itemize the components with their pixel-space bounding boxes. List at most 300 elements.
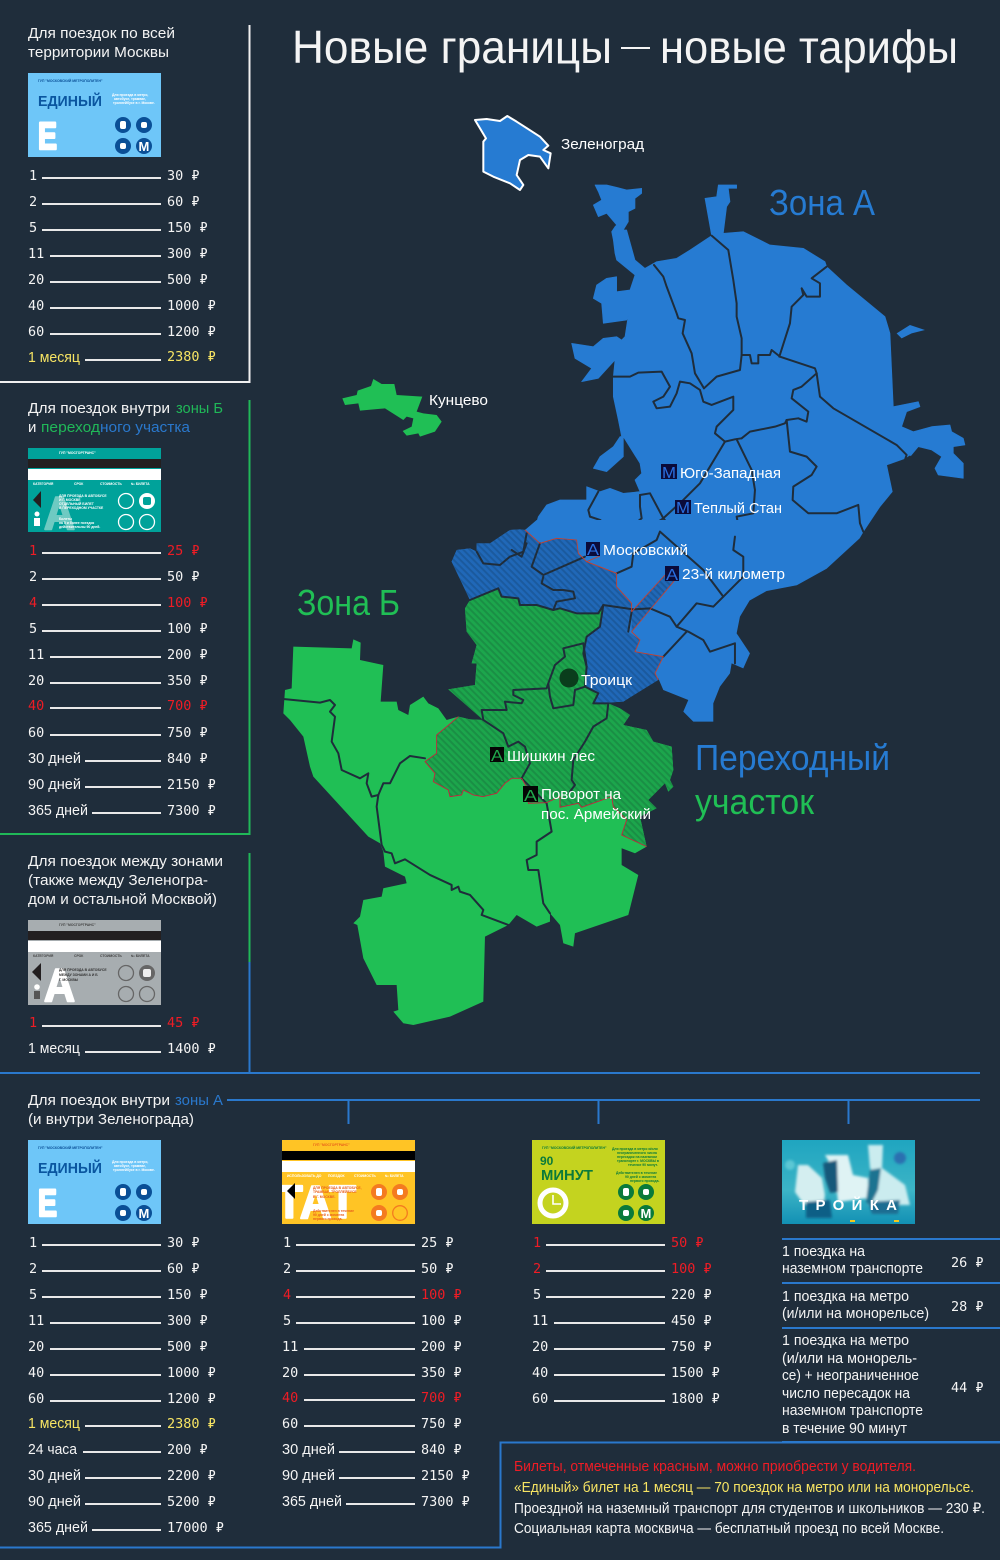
card: grey (28, 920, 161, 1011)
card: grey: СТОИМОСТЬ (100, 954, 122, 958)
row: 20 (28, 272, 44, 288)
row: 2 (29, 569, 37, 585)
region: zone A north (525, 185, 965, 600)
card: Edinyi (28, 73, 161, 158)
heading: inside zone A: (и внутри Зеленограда) (28, 1111, 194, 1128)
row: 20 (28, 673, 44, 689)
row: 700 ₽ (167, 698, 208, 714)
row (28, 1468, 216, 1484)
row: 750 ₽ (421, 1416, 462, 1432)
row: 2200 ₽ (167, 1468, 216, 1484)
tariff: 90 minutes: в течение 90 минут (782, 1421, 907, 1437)
row (28, 1313, 208, 1329)
card: TAT yellow: ТРАМВАЕ, ТРОЛЛЕЙБУСЕ (313, 1190, 357, 1194)
tariff: 90 minutes: число пересадок на (782, 1386, 911, 1402)
row: 40 (28, 298, 44, 314)
card: Edinyi: ЕДИНЫЙ (38, 1159, 102, 1177)
row: 90 дней (28, 777, 81, 793)
card: Edinyi: М (138, 139, 149, 154)
card: grey: МЕЖДУ ЗОНАМИ А И Б (59, 973, 98, 977)
row: 350 ₽ (421, 1365, 462, 1381)
hatched transitional area: green (425, 588, 673, 847)
row: 1 (29, 168, 37, 184)
row (28, 1442, 208, 1458)
row: 60 (28, 1391, 44, 1407)
card: ground teal: № БИЛЕТА (131, 482, 150, 486)
row (29, 569, 200, 585)
row: 45 ₽ (167, 1015, 200, 1031)
row (532, 1339, 712, 1355)
tariff: 90 minutes: се) + неограниченное (782, 1368, 919, 1384)
row: 20 (282, 1365, 298, 1381)
card: TAT yellow: ГУП "МОСГОРТРАНС" (313, 1143, 350, 1147)
stop: Shishkin les: А (491, 748, 503, 765)
row (282, 1494, 470, 1510)
row: 1500 ₽ (671, 1365, 720, 1381)
row: 30 дней (28, 1468, 81, 1484)
row: 100 ₽ (167, 621, 208, 637)
row (28, 324, 216, 340)
row: 5200 ₽ (167, 1494, 216, 1510)
card: Edinyi (28, 1140, 161, 1225)
row (282, 1442, 462, 1458)
card: TAT yellow: первого прохода. (313, 1217, 342, 1221)
row: 50 ₽ (167, 569, 200, 585)
row: 1 месяц (28, 1041, 80, 1057)
row: 150 ₽ (167, 1287, 208, 1303)
card: Edinyi: М (138, 1206, 149, 1221)
row: 1000 ₽ (167, 1365, 216, 1381)
card: grey: А (44, 959, 75, 1011)
card: Troika (782, 1140, 915, 1224)
tariff: surface: наземном транспорте (782, 1261, 923, 1277)
row: 25 ₽ (167, 543, 200, 559)
region: zone A south and zone B (283, 520, 750, 1025)
stop: Moskovsky: Московский (603, 542, 688, 559)
row (28, 1339, 208, 1355)
card: TAT yellow: СТОИМОСТЬ (354, 1174, 376, 1178)
price list (532, 1235, 720, 1407)
card: ground teal: СРОК (74, 482, 84, 486)
row (29, 1287, 208, 1303)
row: 4 (283, 1287, 291, 1303)
row (28, 1416, 216, 1432)
column: TAT (276, 1140, 470, 1510)
heading: Для поездок внутри (28, 400, 170, 417)
row: 1800 ₽ (671, 1391, 720, 1407)
column: Troika (782, 1140, 1000, 1443)
card: TAT yellow: ДЛЯ ПРОЕЗДА В АВТОБУСЕ, (313, 1186, 362, 1190)
zone label: transitional (695, 737, 890, 822)
row: 60 ₽ (167, 1261, 200, 1277)
card: ground teal: КАТЕГОРИЯ (33, 482, 54, 486)
heading (28, 853, 223, 908)
card: 90 minutes: Для проезда в метро и/или (612, 1147, 658, 1151)
row: 5 (533, 1287, 541, 1303)
card: Edinyi: Е (38, 116, 57, 158)
row: 11 (28, 246, 44, 262)
card: Edinyi: ЕДИНЫЙ (38, 92, 102, 110)
row: 100 ₽ (671, 1261, 712, 1277)
card: TAT yellow: ПОЕЗДОК (328, 1174, 346, 1178)
note: Edinyi month: «Единый» билет на 1 месяц — 70 поездок на метро или на монорельсе. (514, 1480, 974, 1496)
card: TAT yellow: ИСПОЛЬЗОВАТЬ ДО (287, 1174, 322, 1178)
zone label: transitional: участок (695, 781, 814, 822)
card: Edinyi: автобусе, трамвае, (114, 97, 146, 101)
tariff: 90 minutes: 1 поездка на метро (782, 1333, 909, 1349)
price list (28, 1235, 224, 1536)
row: 2 (533, 1261, 541, 1277)
card: ground teal: на 5 и более поездок (59, 521, 95, 525)
row: 11 (28, 647, 44, 663)
row: 2 (29, 1261, 37, 1277)
stop: Yugo-Zapadnaya: М (662, 465, 676, 482)
row: 60 (282, 1416, 298, 1432)
row: 90 дней (282, 1468, 335, 1484)
row: 20 (28, 1339, 44, 1355)
row: 2150 ₽ (421, 1468, 470, 1484)
map of Moscow zones (283, 116, 965, 1025)
row: 25 ₽ (421, 1235, 454, 1251)
row: 220 ₽ (671, 1287, 712, 1303)
row (282, 1365, 462, 1381)
card: TAT yellow (276, 1140, 415, 1228)
heading: дом и остальной Москвой) (28, 891, 217, 908)
row: 2380 ₽ (167, 1416, 216, 1432)
row: 150 ₽ (167, 220, 208, 236)
card: 90 minutes: транспорте г. МОСКВЫ в (617, 1159, 659, 1163)
heading: зоны Б (176, 400, 223, 417)
card: 90 minutes: неограниченного числа (617, 1151, 657, 1155)
card: 90 minutes: Действителен в течение (616, 1171, 657, 1175)
row (282, 1468, 470, 1484)
title (292, 21, 958, 73)
zone B territory (283, 588, 673, 1025)
stop: Shishkin les: Шишкин лес (507, 748, 596, 765)
card: 90 minutes (532, 1140, 665, 1224)
row (28, 1041, 216, 1057)
zone label: A: Зона А (769, 182, 875, 223)
stop: Povorot: А (524, 788, 537, 805)
row: 100 ₽ (421, 1287, 462, 1303)
tariff: surface: 26 ₽ (951, 1255, 984, 1271)
row (29, 220, 208, 236)
tariff: surface (782, 1244, 984, 1277)
row: 11 (282, 1339, 298, 1355)
row (28, 673, 208, 689)
row: 5 (29, 1287, 37, 1303)
row: 1 месяц (28, 1416, 80, 1432)
row: 500 ₽ (167, 272, 208, 288)
row: 4 (29, 595, 37, 611)
district borders: zone A north (575, 236, 910, 570)
icon: clock (540, 1190, 566, 1216)
card: TAT yellow: 90 дней с момента (313, 1213, 344, 1217)
row (28, 1365, 216, 1381)
row (29, 543, 200, 559)
card: ground teal: ДЛЯ ПРОЕЗДА В АВТОБУСЕ (59, 494, 107, 498)
row (533, 1235, 704, 1251)
card: grey: ДЛЯ ПРОЕЗДА В АВТОБУСЕ (59, 968, 107, 972)
heading (28, 25, 175, 61)
heading: переход (41, 419, 100, 436)
row: 750 ₽ (167, 725, 208, 741)
heading: ного участка (100, 419, 191, 436)
row (283, 1287, 462, 1303)
row: 7300 ₽ (167, 803, 216, 819)
row: 5 (283, 1313, 291, 1329)
row: 100 ₽ (167, 595, 208, 611)
tariff: 90 minutes: наземном транспорте (782, 1403, 923, 1419)
row: 7300 ₽ (421, 1494, 470, 1510)
tariff: metro: 28 ₽ (951, 1299, 984, 1315)
row (29, 1235, 200, 1251)
row: 840 ₽ (167, 751, 208, 767)
row: 90 дней (28, 1494, 81, 1510)
row: 11 (532, 1313, 548, 1329)
card: ground teal: И Г. МОСКВЕ (59, 498, 81, 502)
card: ground teal: А (44, 487, 75, 539)
row: 1 (29, 543, 37, 559)
heading: inside zone A: Для поездок внутри (28, 1092, 170, 1109)
region: Kuntsevo (342, 379, 442, 437)
region: Zelenograd (475, 116, 551, 190)
zone label: transitional: Переходный (695, 737, 890, 778)
tariff: metro (782, 1289, 984, 1322)
row: 1200 ₽ (167, 324, 216, 340)
row: 60 (532, 1391, 548, 1407)
card: Edinyi: ГУП "МОСКОВСКИЙ МЕТРОПОЛИТЕН" (38, 1146, 103, 1150)
row (29, 168, 200, 184)
row: 40 (28, 1365, 44, 1381)
heading: Для поездок между зонами (28, 853, 223, 870)
stop: Troitsk (560, 668, 632, 689)
heading: Для поездок по всей (28, 25, 175, 42)
card: 90 minutes: М (640, 1206, 651, 1221)
row: 200 ₽ (167, 647, 208, 663)
zone label: B: Зона Б (297, 582, 400, 623)
card: 90 minutes: первого прохода. (630, 1179, 659, 1183)
row: 750 ₽ (671, 1339, 712, 1355)
heading (28, 400, 223, 436)
row: 2150 ₽ (167, 777, 216, 793)
row (29, 621, 208, 637)
row (28, 647, 208, 663)
row: 24 часа (28, 1442, 78, 1458)
row (283, 1235, 454, 1251)
tariff: metro: 1 поездка на метро (782, 1289, 909, 1305)
panel: zone B and transitional (0, 400, 250, 834)
row (28, 698, 208, 714)
stop: Yugo-Zapadnaya: Юго-Западная (680, 465, 781, 482)
row (28, 1391, 216, 1407)
box frame (0, 1442, 1000, 1548)
row: 11 (28, 1313, 44, 1329)
row: 840 ₽ (421, 1442, 462, 1458)
row (28, 298, 216, 314)
row (28, 349, 216, 366)
row: 450 ₽ (671, 1313, 712, 1329)
card: 90 minutes: ГУП "МОСКОВСКИЙ МЕТРОПОЛИТЕН" (542, 1146, 607, 1150)
card: 90 minutes: пересадок на наземном (617, 1155, 657, 1159)
row (28, 1494, 216, 1510)
price list (28, 543, 216, 819)
row (532, 1365, 720, 1381)
row (29, 1015, 200, 1031)
row (532, 1313, 712, 1329)
card: ground teal: Билеты (59, 517, 72, 521)
card: Edinyi: Для проезда в метро, (112, 93, 148, 97)
transitional border: red lines (425, 530, 675, 847)
row: 2 (29, 194, 37, 210)
row: 365 дней (28, 1520, 88, 1536)
card: Edinyi: Для проезда в метро, (112, 1160, 148, 1164)
row (283, 1261, 454, 1277)
row: 50 ₽ (421, 1261, 454, 1277)
card: Edinyi: автобусе, трамвае, (114, 1164, 146, 1168)
price list (28, 1015, 216, 1057)
card: Edinyi: троллейбусе в г. Москве. (113, 1168, 155, 1172)
row (28, 803, 216, 819)
card: grey: КАТЕГОРИЯ (33, 954, 54, 958)
rules (782, 1238, 1000, 1443)
heading: inside zone A: зоны А (175, 1092, 223, 1109)
row: 500 ₽ (167, 1339, 208, 1355)
panel frame (0, 400, 250, 834)
row: 1200 ₽ (167, 1391, 216, 1407)
row (28, 751, 208, 767)
row (28, 777, 216, 793)
row: 40 (282, 1390, 298, 1406)
card: TAT yellow: В Г. МОСКВЕ. (313, 1195, 335, 1199)
heading: и (28, 419, 36, 436)
row: 5 (29, 621, 37, 637)
column: 90 minutes (532, 1140, 720, 1407)
card: grey: СРОК (74, 954, 84, 958)
district borders: south (283, 532, 743, 925)
row: 1 (29, 1235, 37, 1251)
stop: Povorot (523, 786, 651, 823)
heading: территории Москвы (28, 44, 169, 61)
row: 1000 ₽ (167, 298, 216, 314)
card: grey: Г. МОСКВЫ (59, 978, 79, 982)
row (28, 725, 208, 741)
stop: 23rd km: А (666, 567, 678, 584)
row: 2380 ₽ (167, 349, 216, 365)
row: 1400 ₽ (167, 1041, 216, 1057)
card: ground teal: В ПЕРЕХОДНОМ УЧАСТКЕ (59, 506, 104, 510)
row: 30 дней (282, 1442, 335, 1458)
title: новые тарифы (660, 21, 958, 73)
card: grey: ГУП "МОСГОРТРАНС" (59, 923, 96, 927)
column: Edinyi (28, 1140, 224, 1536)
card: Edinyi: Е (38, 1183, 57, 1225)
panel frame (0, 25, 250, 382)
heading: inside zone A (28, 1092, 223, 1128)
panel: whole Moscow (0, 25, 250, 382)
hatched transitional area: blue (452, 529, 675, 703)
card: ground teal: ГУП "МОСГОРТРАНС" (59, 451, 96, 455)
divider lines for zone A section (0, 1073, 980, 1124)
stop: Povorot: пос. Армейский (541, 806, 651, 823)
row (28, 246, 208, 262)
price list (28, 168, 216, 366)
card: Troika: ТРОЙКА (799, 1196, 897, 1214)
row (29, 1261, 200, 1277)
row: 60 ₽ (167, 194, 200, 210)
row: 60 (28, 324, 44, 340)
tariff: 90 minutes: (и/или на монорель- (782, 1351, 917, 1367)
row: 17000 ₽ (167, 1520, 224, 1536)
row (28, 1520, 224, 1536)
card: ground teal: СТОИМОСТЬ (100, 482, 122, 486)
row (282, 1416, 462, 1432)
card: ground teal (28, 448, 161, 539)
card: ground teal: ОТДЕЛЬНЫЙ БИЛЕТ (59, 502, 95, 506)
row: 300 ₽ (167, 1313, 208, 1329)
stop: Teply Stan: Теплый Стан (694, 500, 782, 517)
row: 700 ₽ (421, 1390, 462, 1406)
row: 1 (283, 1235, 291, 1251)
stop: Moskovsky: А (587, 542, 599, 559)
row (29, 194, 200, 210)
card: ground teal: действительны 90 дней. (59, 525, 100, 529)
row: 30 дней (28, 751, 81, 767)
row: 1 месяц (28, 350, 80, 366)
panel frame (248, 853, 250, 1073)
row: 40 (532, 1365, 548, 1381)
row (282, 1339, 462, 1355)
row: 1 (533, 1235, 541, 1251)
stop: Troitsk: Троицк (581, 672, 632, 689)
stop: 23rd km: 23-й километр (682, 566, 785, 583)
note: social card: Социальная карта москвича — бесплатный проезд по всей Москве. (514, 1521, 944, 1537)
row: 350 ₽ (167, 673, 208, 689)
row: 300 ₽ (167, 246, 208, 262)
row: 5 (29, 220, 37, 236)
row: 50 ₽ (671, 1235, 704, 1251)
card: 90 minutes: 90 (540, 1154, 554, 1168)
tariff: 90 minutes (782, 1333, 984, 1437)
row: 2 (283, 1261, 291, 1277)
card: Edinyi: ГУП "МОСКОВСКИЙ МЕТРОПОЛИТЕН" (38, 79, 103, 83)
notes box (0, 1442, 1000, 1548)
row: 200 ₽ (421, 1339, 462, 1355)
price list (282, 1235, 470, 1510)
tariff: metro: (и/или на монорельсе) (782, 1306, 929, 1322)
row (29, 595, 208, 611)
row (532, 1391, 720, 1407)
card: TAT yellow: № БИЛЕТА (385, 1174, 404, 1178)
row (533, 1287, 712, 1303)
row: 1 (29, 1015, 37, 1031)
panel: between zones (28, 853, 250, 1073)
tariff: surface: 1 поездка на (782, 1244, 866, 1260)
card: 90 minutes: МИНУТ (541, 1167, 593, 1184)
card: 90 minutes: течение 90 минут. (628, 1163, 658, 1167)
card: Edinyi: троллейбусе в г. Москве. (113, 101, 155, 105)
card: 90 minutes: 90 дней с момента (625, 1175, 656, 1179)
place label: Kuntsevo: Кунцево (429, 392, 488, 409)
note: red tickets: Билеты, отмеченные красным, можно приобрести у водителя. (514, 1459, 916, 1475)
row: 100 ₽ (421, 1313, 462, 1329)
card: grey: № БИЛЕТА (131, 954, 150, 958)
row: 40 (28, 698, 44, 714)
row: 365 дней (28, 803, 88, 819)
card: TAT yellow: Действителен в течение (313, 1209, 354, 1213)
tariff: 90 minutes: 44 ₽ (951, 1380, 984, 1396)
row: 30 ₽ (167, 168, 200, 184)
